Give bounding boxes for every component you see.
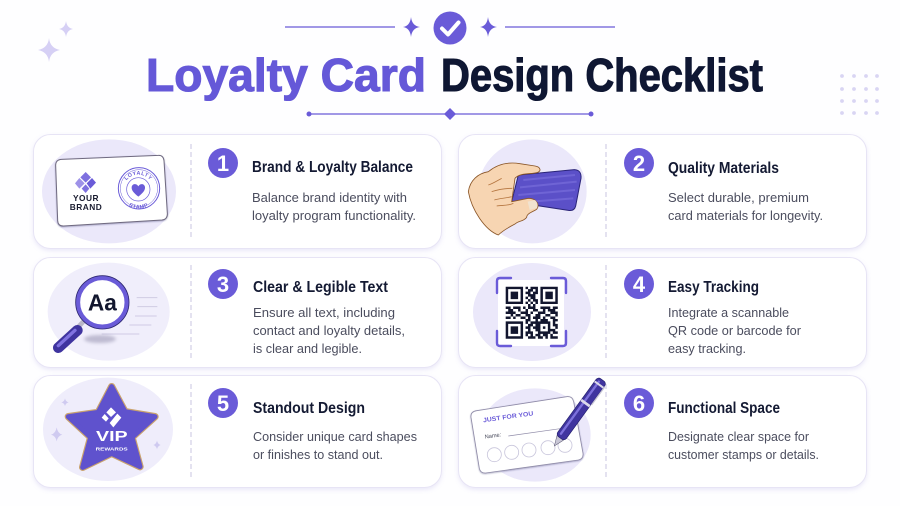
description 6 xyxy=(668,429,819,462)
description 3: contact and loyalty details, xyxy=(253,323,405,338)
illustration: QR code scanner xyxy=(473,263,591,361)
illustration: hand holding card xyxy=(468,139,587,243)
panel: 4 easy tracking xyxy=(458,258,866,368)
title xyxy=(146,49,763,101)
illustration: stamp card with pen: JUST FOR YOU xyxy=(483,410,534,424)
description 4: Integrate a scannable xyxy=(668,305,789,320)
title underline ornament xyxy=(306,108,594,120)
description 2: card materials for longevity. xyxy=(668,208,823,223)
number badge 6: 6 xyxy=(633,391,645,416)
description 4 xyxy=(668,305,802,356)
description 5 xyxy=(253,429,417,462)
heading 6: Functional Space xyxy=(668,400,780,417)
description 6: Designate clear space for xyxy=(668,429,810,444)
description 1: loyalty program functionality. xyxy=(252,208,416,223)
heading 1: Brand & Loyalty Balance xyxy=(252,159,413,176)
decorative sparkles top left xyxy=(38,21,73,62)
number badge 5: 5 xyxy=(217,391,229,416)
illustration: brand loyalty card: STAMP xyxy=(129,203,147,208)
illustration: brand loyalty card: YOUR xyxy=(73,193,99,203)
description 6: customer stamps or details. xyxy=(668,447,819,462)
panel: 1 brand and loyalty balance xyxy=(32,134,442,252)
title: Design Checklist xyxy=(441,49,763,101)
number badge 4 xyxy=(624,269,654,299)
description 2: Select durable, premium xyxy=(668,190,809,205)
illustration: magnifier with Aa xyxy=(48,263,170,361)
heading 4: Easy Tracking xyxy=(668,279,759,296)
number badge 3: 3 xyxy=(217,272,229,297)
heading 5: Standout Design xyxy=(253,400,365,417)
description 4: QR code or barcode for xyxy=(668,323,802,338)
description 3: is clear and legible. xyxy=(253,341,362,356)
description 1: Balance brand identity with xyxy=(252,190,407,205)
illustration: stamp card with pen xyxy=(471,377,607,482)
number badge 4: 4 xyxy=(633,272,646,297)
number badge 2 xyxy=(624,148,654,178)
number badge 6 xyxy=(624,388,654,418)
illustration: VIP rewards star: REWARDS xyxy=(96,446,129,452)
description 5: Consider unique card shapes xyxy=(253,429,417,444)
illustration: brand loyalty card xyxy=(42,140,176,244)
header ornament with check badge xyxy=(285,12,615,44)
description 2 xyxy=(668,190,823,223)
panel: 6 functional space xyxy=(458,376,866,488)
description 4: easy tracking. xyxy=(668,341,746,356)
number badge 1: 1 xyxy=(217,151,229,176)
description 3: Ensure all text, including xyxy=(253,305,395,320)
illustration: magnifier with Aa: Aa xyxy=(88,290,117,316)
number badge 2: 2 xyxy=(633,151,645,176)
number badge 3 xyxy=(208,269,238,299)
title: Loyalty Card xyxy=(146,49,426,101)
heading 3: Clear & Legible Text xyxy=(253,279,388,296)
illustration: brand loyalty card: LOYALTY xyxy=(124,171,152,180)
number badge 1 xyxy=(208,148,238,178)
description 1 xyxy=(252,190,416,223)
decorative dot grid top right xyxy=(840,74,879,115)
number badge 5 xyxy=(208,388,238,418)
illustration: VIP rewards star xyxy=(43,378,173,481)
panel: 2 quality materials xyxy=(458,134,866,248)
illustration: stamp card with pen: Name: xyxy=(484,432,502,441)
panel: 3 clear and legible text xyxy=(34,258,442,368)
panel: 5 standout design xyxy=(34,376,442,488)
description 5: or finishes to stand out. xyxy=(253,447,383,462)
illustration: brand loyalty card: BRAND xyxy=(70,202,102,212)
illustration: VIP rewards star: VIP xyxy=(96,429,128,445)
description 3 xyxy=(253,305,405,356)
heading 2: Quality Materials xyxy=(668,160,779,177)
